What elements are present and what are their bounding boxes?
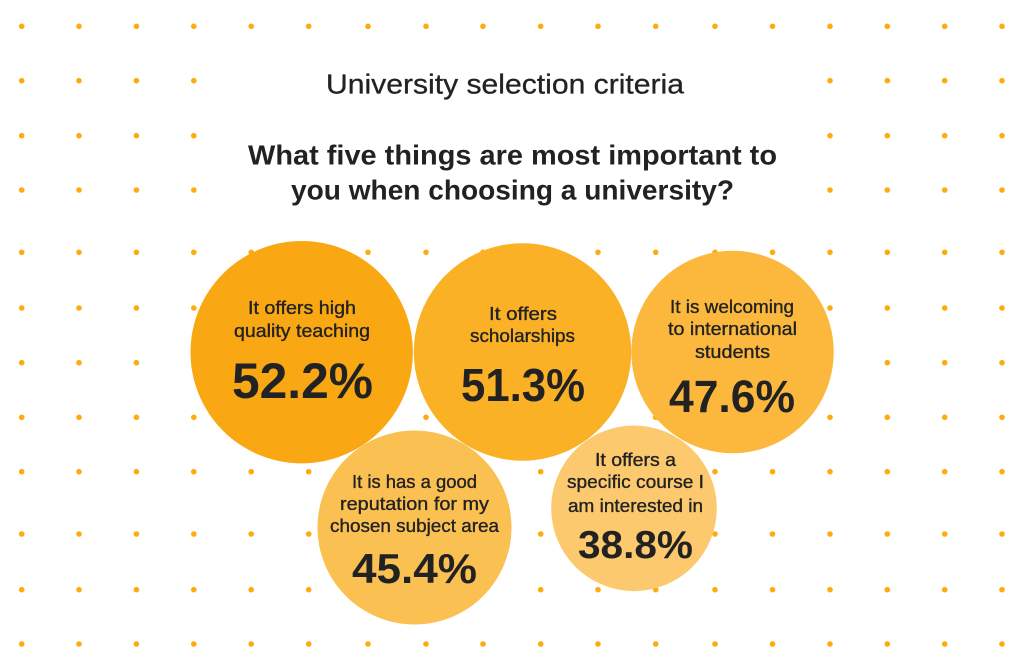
bubble: specific course 38.8%: It offers a: [595, 449, 677, 470]
bubble: welcoming to international students 47.6%: 47.6%: [669, 371, 795, 422]
bubble: specific course 38.8%: 38.8%: [578, 524, 693, 567]
bubble: scholarships 51.3%: It offers: [489, 303, 557, 324]
bubble: high quality teaching 52.2%: 52.2%: [232, 353, 373, 409]
bubble: scholarships 51.3%: scholarships: [470, 325, 575, 346]
bubble: high quality teaching 52.2%: [191, 241, 413, 463]
bubble: specific course 38.8%: [551, 426, 717, 591]
bubble: good reputation for subject area 45.4%: 45.4%: [352, 545, 477, 592]
bubble: scholarships 51.3%: [414, 243, 631, 461]
heading question: you when choosing a university?: [291, 174, 734, 206]
title: University selection criteria: [326, 68, 684, 100]
bubble: high quality teaching 52.2%: quality teaching: [234, 320, 370, 341]
bubble: good reputation for subject area 45.4%: reputation for my: [340, 493, 490, 514]
bubble: welcoming to international students 47.6%: students: [695, 341, 770, 362]
bubble: good reputation for subject area 45.4%: chosen subject area: [330, 515, 500, 536]
bubble: high quality teaching 52.2%: It offers high: [248, 297, 356, 318]
bubble: welcoming to international students 47.6%: [631, 251, 834, 453]
heading question: [248, 140, 777, 206]
bubble: good reputation for subject area 45.4%: [318, 430, 512, 624]
bubble: welcoming to international students 47.6%: to international: [668, 318, 797, 339]
heading question: What five things are most important to: [248, 140, 777, 170]
bubble: specific course 38.8%: am interested in: [568, 495, 703, 516]
bubble: specific course 38.8%: specific course I: [567, 471, 704, 492]
bubble: good reputation for subject area 45.4%: It is has a good: [352, 471, 477, 492]
bubble: scholarships 51.3%: 51.3%: [461, 359, 585, 411]
bubble: welcoming to international students 47.6%: It is welcoming: [670, 296, 794, 317]
